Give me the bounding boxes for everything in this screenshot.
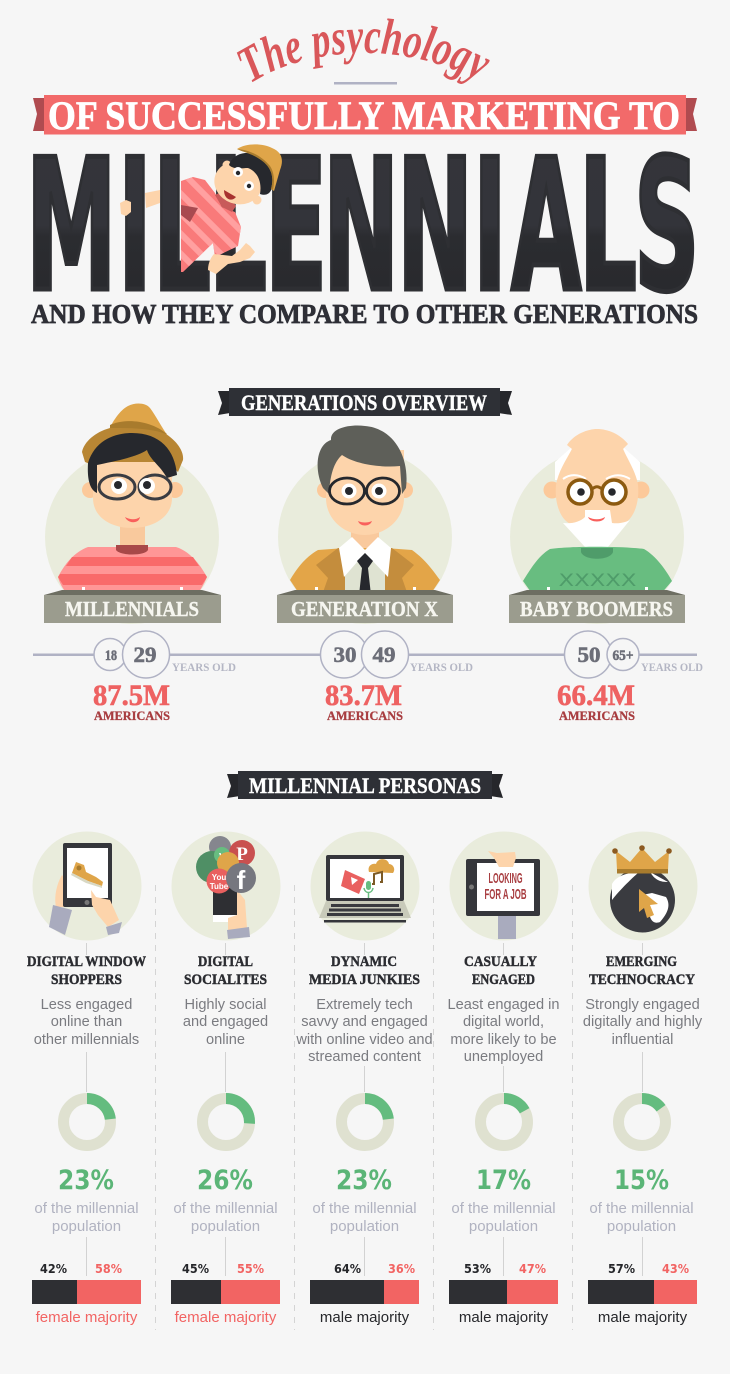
- timeline: age ranges: [33, 631, 703, 678]
- title: Millennials: MILLENNIALS: [26, 120, 700, 332]
- icon: social media phone: P: [236, 844, 248, 865]
- timeline: age ranges: 49: [372, 642, 396, 667]
- stat: baby boomers population: 66.4M: [557, 679, 635, 712]
- stat: 26% of the millennial population: of the millennial: [173, 1200, 278, 1217]
- label: generation x: [277, 590, 453, 623]
- icon: social media phone: [172, 832, 280, 940]
- stat: baby boomers population: AMERICANS: [559, 708, 635, 723]
- stat: generation x population: AMERICANS: [327, 708, 403, 723]
- donut chart: emerging technocracy 15%: [618, 1098, 666, 1146]
- donut chart: digital socialites 26%: [202, 1098, 250, 1146]
- persona text: digital socialites: SOCIALITES: [184, 972, 267, 988]
- stat: 26% of the millennial population: population: [191, 1218, 260, 1235]
- label: millennials: MILLENNIALS: [65, 597, 199, 621]
- icon: social media phone: f: [237, 865, 246, 895]
- timeline: age ranges: 50: [578, 642, 600, 667]
- timeline: age ranges: YEARS OLD: [172, 660, 236, 674]
- label: generation x: GENERATION X: [291, 597, 438, 621]
- persona text: emerging technocracy: influential: [612, 1032, 673, 1048]
- icon: looking for a job sign: FOR A JOB: [484, 886, 527, 903]
- persona text: emerging technocracy: EMERGING: [606, 954, 677, 970]
- stat: 17% of the millennial population: population: [469, 1218, 538, 1235]
- persona text: dynamic media junkies: [295, 954, 433, 1065]
- persona text: digital socialites: DIGITAL: [198, 954, 253, 970]
- icon: crown on globe with cursor: [588, 832, 698, 940]
- stat: millennials population: AMERICANS: [94, 708, 170, 723]
- stat: 17% of the millennial population: [451, 1165, 556, 1235]
- timeline: age ranges: 65+: [612, 648, 634, 664]
- persona text: digital window shoppers: DIGITAL WINDOW: [27, 954, 146, 970]
- stat: 23% of the millennial population: [34, 1165, 139, 1235]
- persona text: dynamic media junkies: savvy and engaged: [301, 1014, 428, 1030]
- persona text: emerging technocracy: digitally and highly: [583, 1014, 703, 1030]
- gender bar: 53% 47% male majority: 47%: [519, 1261, 546, 1276]
- stat: 26% of the millennial population: 26%: [197, 1165, 253, 1196]
- gender bar: 57% 43% male majority: 43%: [662, 1261, 689, 1276]
- gender bar: 45% 55% female majority: [171, 1261, 280, 1326]
- persona text: digital socialites: [183, 954, 268, 1048]
- title: The psychology: The psychology: [236, 18, 490, 84]
- stat: 15% of the millennial population: of the millennial: [589, 1200, 694, 1217]
- timeline: age ranges: 30: [334, 642, 356, 667]
- gender bar: 57% 43% male majority: 57%: [608, 1261, 635, 1276]
- character: baby boomer: [510, 429, 684, 624]
- persona text: dynamic media junkies: Extremely tech: [316, 997, 413, 1013]
- gender bar: 45% 55% female majority: 45%: [182, 1261, 209, 1276]
- icon: looking for a job sign: [450, 832, 558, 940]
- persona text: digital window shoppers: online than: [51, 1014, 122, 1030]
- persona text: digital socialites: online: [206, 1032, 245, 1048]
- label: baby boomers: BABY BOOMERS: [520, 597, 673, 621]
- icon: social media phone: v: [219, 850, 226, 862]
- persona text: emerging technocracy: TECHNOCRACY: [589, 972, 695, 988]
- gender bar: 53% 47% male majority: [449, 1261, 558, 1326]
- gender bar: 42% 58% female majority: 58%: [95, 1261, 122, 1276]
- stat: 15% of the millennial population: [589, 1165, 694, 1235]
- donut chart: dynamic media junkies 23%: [342, 1098, 388, 1146]
- gender bar: 64% 36% male majority: 64%: [334, 1261, 361, 1276]
- character: millennial: [45, 404, 219, 624]
- stat: 23% of the millennial population: [312, 1165, 417, 1235]
- persona text: digital socialites: Highly social: [185, 997, 266, 1013]
- gender bar: 64% 36% male majority: male majority: [320, 1309, 410, 1326]
- heading ribbon: millennial personas: MILLENNIAL PERSONAS: [249, 773, 481, 798]
- persona text: casually engaged: ENGAGED: [472, 972, 535, 988]
- persona text: casually engaged: [448, 954, 559, 1065]
- stat: 23% of the millennial population: population: [330, 1218, 399, 1235]
- icon: looking for a job sign: LOOKING: [488, 870, 522, 887]
- timeline: age ranges: 29: [134, 642, 156, 667]
- donut chart: casually engaged 17%: [480, 1098, 528, 1146]
- stat: 17% of the millennial population: of the millennial: [451, 1200, 556, 1217]
- stat: generation x population: 83.7M: [325, 679, 402, 712]
- stat: 26% of the millennial population: [173, 1165, 278, 1235]
- gender bar: 53% 47% male majority: male majority: [459, 1309, 549, 1326]
- persona text: casually engaged: digital world,: [463, 1014, 544, 1030]
- gender bar: 45% 55% female majority: 55%: [237, 1261, 264, 1276]
- persona text: digital window shoppers: Less engaged: [41, 997, 132, 1013]
- persona text: dynamic media junkies: DYNAMIC: [331, 954, 397, 970]
- icon: laptop with media: [310, 832, 420, 940]
- icon: social media phone: You: [212, 873, 226, 882]
- gender bar: 42% 58% female majority: female majority: [36, 1309, 138, 1326]
- stat: 23% of the millennial population: of the millennial: [34, 1200, 139, 1217]
- stat: 23% of the millennial population: 23%: [58, 1165, 114, 1196]
- stat: 15% of the millennial population: population: [607, 1218, 676, 1235]
- timeline: age ranges: YEARS OLD: [641, 660, 703, 674]
- persona text: casually engaged: CASUALLY: [464, 954, 537, 970]
- stat: 23% of the millennial population: of the millennial: [312, 1200, 417, 1217]
- donut chart: digital window shoppers 23%: [64, 1098, 110, 1146]
- heading ribbon: generations overview: GENERATIONS OVERVIEW: [241, 390, 487, 415]
- stat: millennials population: 87.5M: [93, 679, 170, 712]
- stat: 23% of the millennial population: population: [52, 1218, 121, 1235]
- gender bar: 57% 43% male majority: male majority: [598, 1309, 688, 1326]
- gender bar: 42% 58% female majority: 42%: [40, 1261, 67, 1276]
- character: generation x: [278, 426, 452, 624]
- gender bar: 45% 55% female majority: female majority: [175, 1309, 277, 1326]
- gender bar: 64% 36% male majority: 36%: [388, 1261, 415, 1276]
- timeline: age ranges: YEARS OLD: [410, 660, 473, 674]
- persona text: digital socialites: and engaged: [183, 1014, 268, 1030]
- persona text: emerging technocracy: Strongly engaged: [585, 997, 700, 1013]
- timeline: age ranges: 18: [105, 648, 117, 664]
- gender bar: 64% 36% male majority: [310, 1261, 419, 1326]
- stat: 15% of the millennial population: 15%: [614, 1165, 669, 1196]
- persona text: dynamic media junkies: MEDIA JUNKIES: [309, 972, 420, 988]
- illustration: peeking man: [120, 144, 282, 278]
- persona text: dynamic media junkies: with online video and: [295, 1032, 433, 1048]
- gender bar: 57% 43% male majority: [588, 1261, 697, 1326]
- stat: 23% of the millennial population: 23%: [336, 1165, 392, 1196]
- persona text: casually engaged: Least engaged in: [448, 997, 559, 1013]
- persona text: digital window shoppers: SHOPPERS: [51, 972, 122, 988]
- label: millennials: [44, 590, 221, 623]
- persona text: emerging technocracy: [583, 954, 703, 1048]
- persona text: casually engaged: more likely to be: [450, 1032, 557, 1048]
- gender bar: 42% 58% female majority: [32, 1261, 141, 1326]
- persona text: digital window shoppers: [27, 954, 146, 1048]
- character: baby boomer: XXXXX: [558, 571, 637, 591]
- persona text: digital window shoppers: other millennials: [34, 1032, 139, 1048]
- label: baby boomers: [509, 590, 685, 623]
- icon: social media phone: Tube: [210, 882, 229, 891]
- persona text: dynamic media junkies: streamed content: [308, 1049, 421, 1065]
- subtitle: AND HOW THEY COMPARE TO OTHER GENERATIONS: [31, 299, 698, 329]
- stat: 17% of the millennial population: 17%: [476, 1165, 531, 1196]
- icon: tablet with sneaker: [32, 832, 142, 940]
- gender bar: 53% 47% male majority: 53%: [464, 1261, 491, 1276]
- persona text: casually engaged: unemployed: [464, 1049, 543, 1065]
